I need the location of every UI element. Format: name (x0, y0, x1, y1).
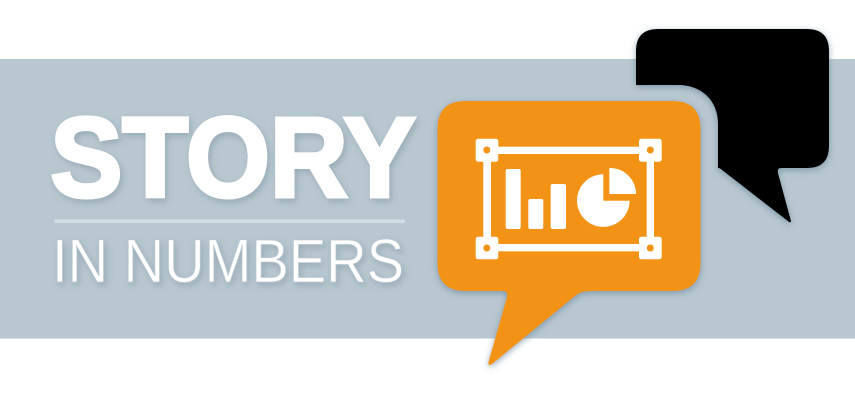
icon frame (476, 139, 662, 259)
subtitle: IN NUMBERS: IN NUMBERS (52, 227, 404, 295)
background band (0, 59, 855, 338)
title: STORY: STORY (50, 94, 416, 220)
icon: bar chart (506, 169, 566, 229)
icon: pie chart (577, 168, 636, 227)
icon: presentation chart (476, 139, 662, 259)
orange speech bubble (438, 101, 700, 365)
black speech bubble (636, 29, 829, 222)
divider line (54, 220, 405, 223)
